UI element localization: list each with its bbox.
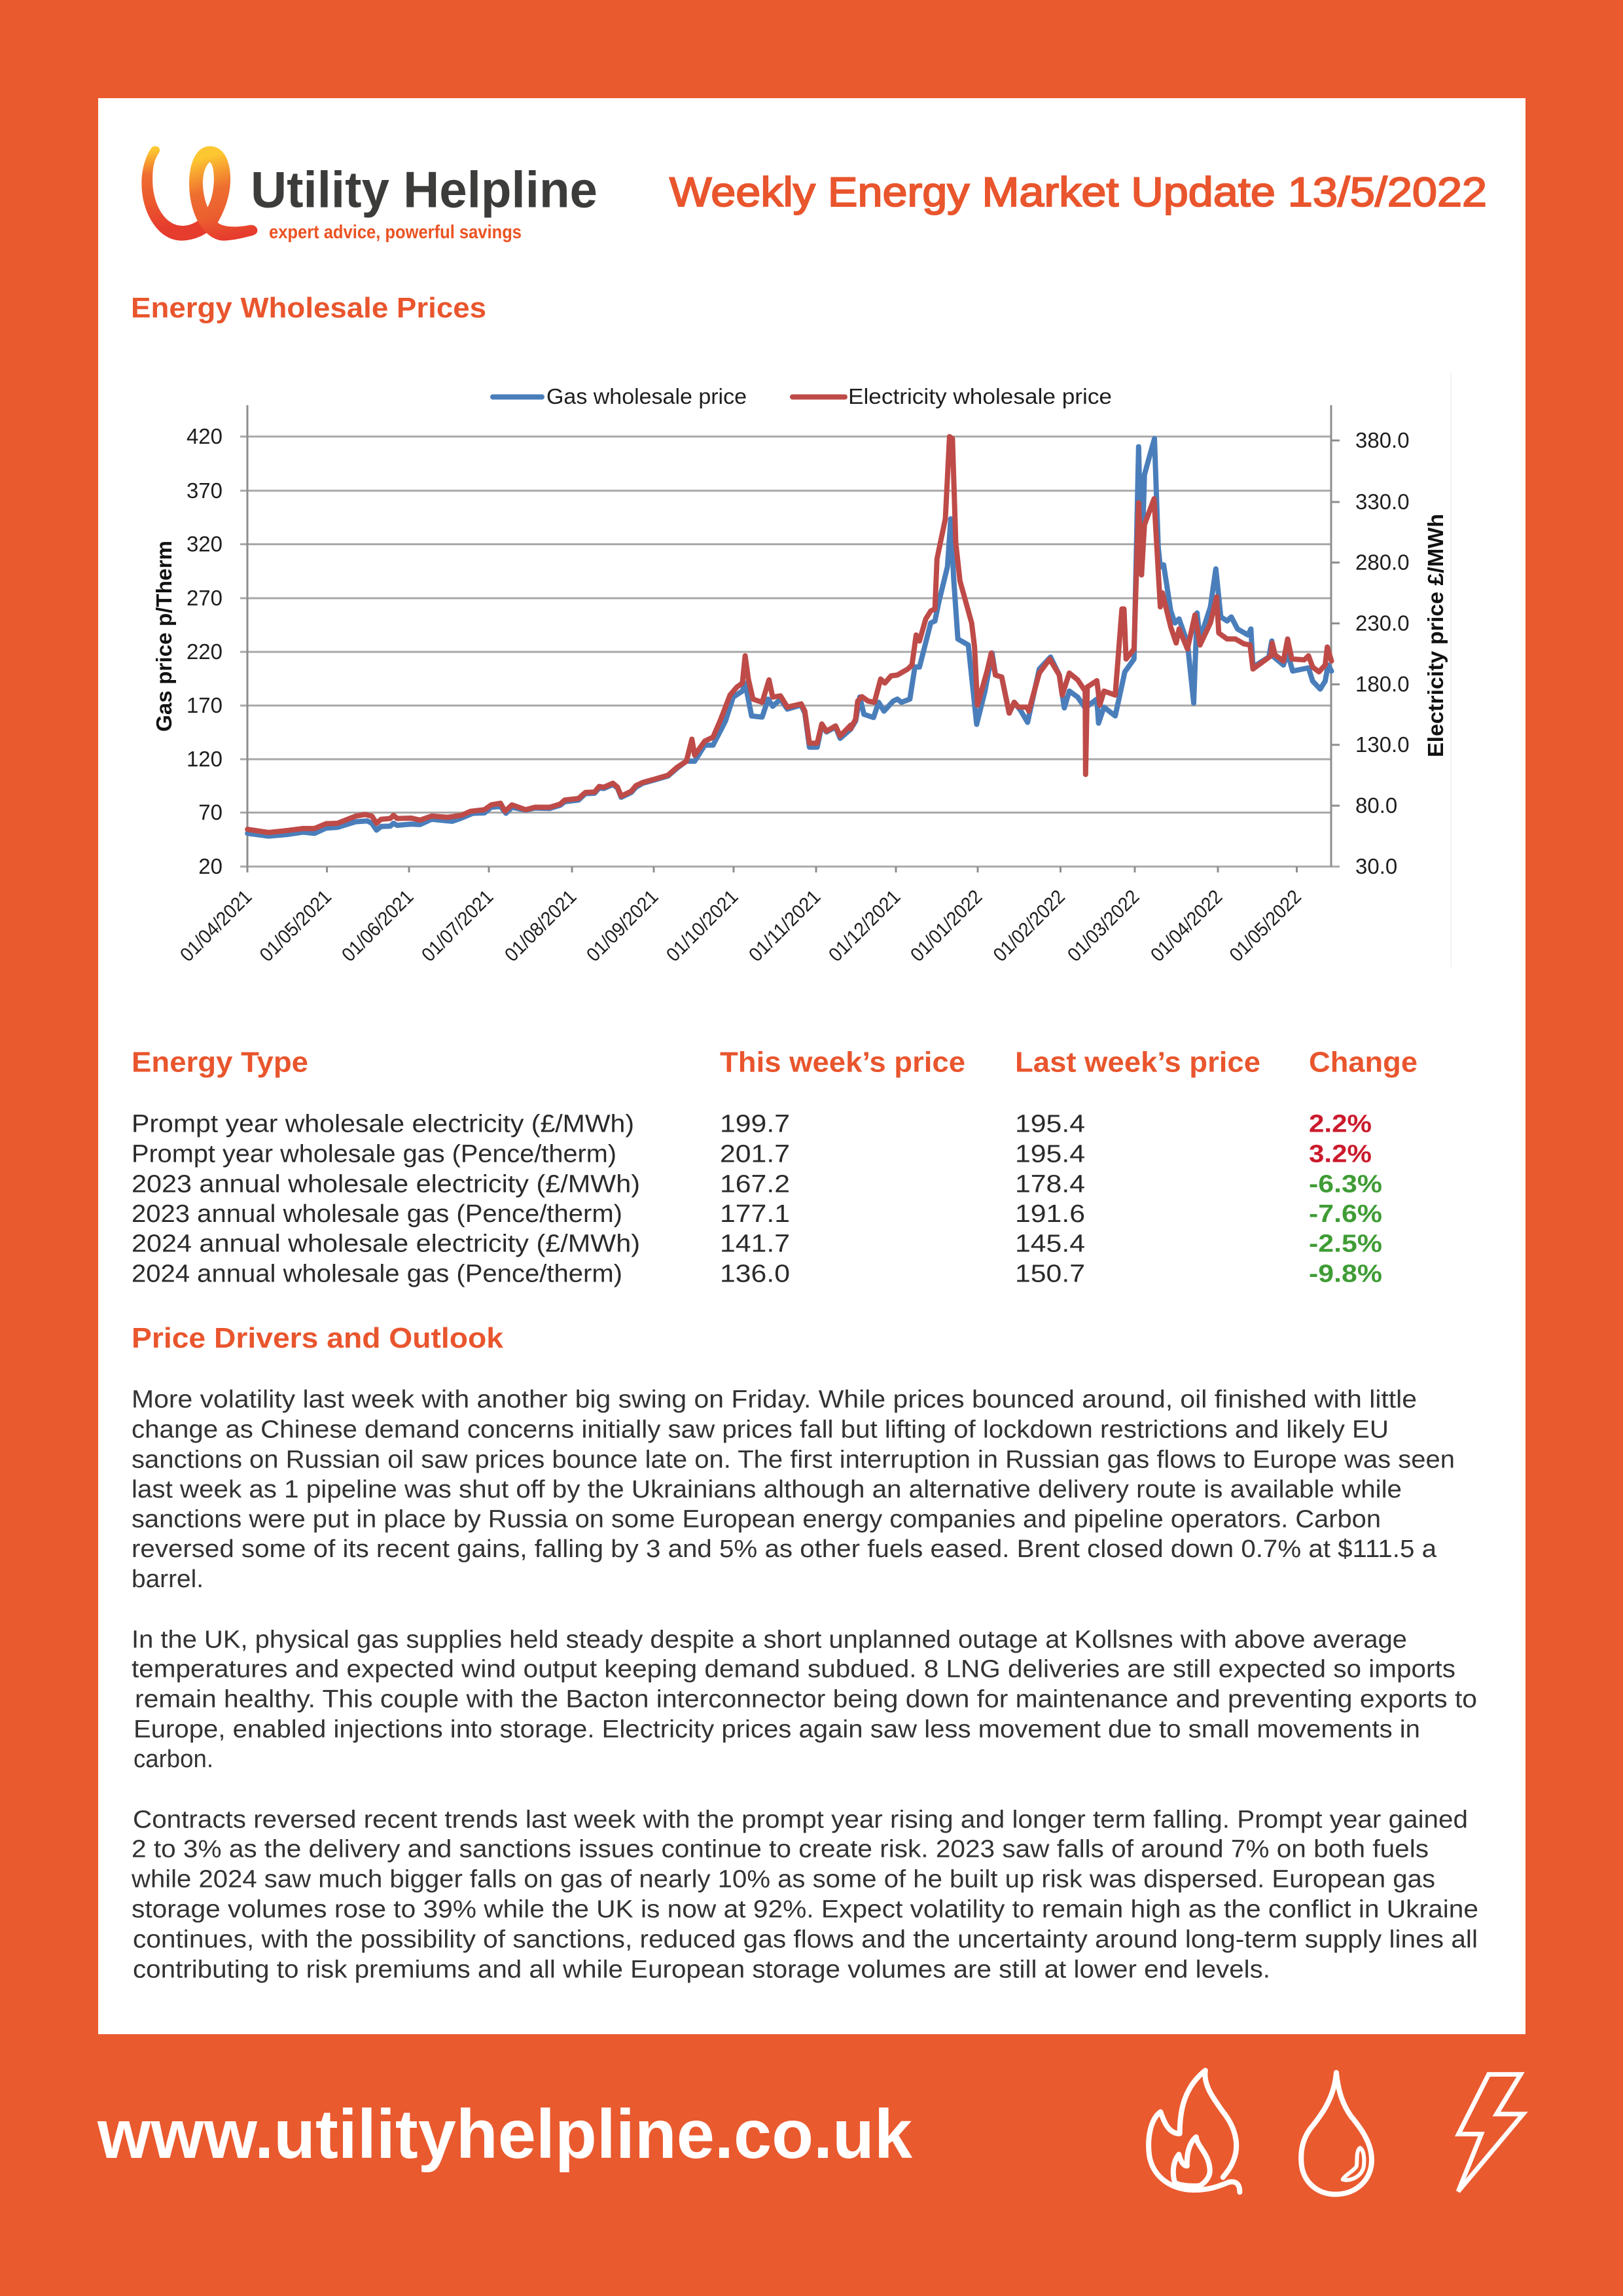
date axis labels: 01/10/2021 [662, 886, 742, 966]
heading: Price Drivers and Outlook: Price Drivers and Outlook [132, 1322, 504, 1354]
logo tagline: expert advice, powerful savings [269, 222, 522, 243]
paragraph 3: 2 to 3% as the delivery and sanctions issues continue to create risk. 2023 saw falls of around 7% on both fuels [132, 1835, 1429, 1863]
right axis labels: 380.0 [1355, 428, 1410, 452]
paragraph 1: last week as 1 pipeline was shut off by the Ukrainians although an alternative delivery route is available while [132, 1476, 1402, 1503]
paragraph 3: storage volumes rose to 39% while the UK is now at 92%. Expect volatility to remain high as the conflict in Ukraine [132, 1895, 1478, 1923]
heading: Energy Wholesale Prices: Energy Wholesale Prices [131, 292, 486, 324]
paragraph 1: barrel. [132, 1566, 204, 1593]
table row: 2023 gas: -7.6% [1309, 1200, 1382, 1228]
paragraph 1: More volatility last week with another big swing on Friday. While prices bounced around, oil finished with little [132, 1386, 1417, 1414]
table row: prompt year electricity: 2.2% [1309, 1110, 1372, 1138]
gas price line [247, 439, 1331, 836]
date axis labels: 01/11/2021 [745, 886, 825, 966]
table header row: This week’s price [720, 1047, 965, 1079]
paragraph 3: contributing to risk premiums and all while European storage volumes are still at lower end levels. [133, 1956, 1270, 1984]
logo icon: ribbon mark [141, 146, 257, 241]
table row: 2024 gas: 2024 annual wholesale gas (Pence/therm) [132, 1260, 622, 1287]
table row: 2023 gas: 191.6 [1015, 1200, 1085, 1228]
date axis labels: 01/12/2021 [825, 886, 904, 966]
table row: prompt year gas: Prompt year wholesale gas (Pence/therm) [132, 1140, 616, 1168]
date axis labels: 01/01/2022 [906, 886, 986, 966]
table row: prompt year gas: 201.7 [720, 1140, 790, 1168]
left axis labels: 270 [187, 586, 223, 610]
table row: 2023 gas [132, 1200, 1382, 1228]
date axis labels [176, 886, 1306, 966]
left axis title: Gas price p/Therm [152, 541, 176, 732]
logo wordmark: Utility Helpline [251, 161, 597, 219]
title: Weekly Energy Market Update 13/5/2022 [669, 170, 1487, 215]
table row: 2023 electricity [132, 1170, 1382, 1198]
table row: prompt year gas [132, 1140, 1372, 1168]
right axis labels: 280.0 [1355, 550, 1410, 575]
date axis labels: 01/03/2022 [1063, 886, 1143, 966]
table row: 2024 electricity: -2.5% [1309, 1230, 1382, 1258]
left axis labels [187, 424, 223, 878]
date axis labels: 01/04/2021 [176, 886, 256, 966]
table header row: Change [1309, 1047, 1418, 1079]
table row: 2024 electricity: 2024 annual wholesale electricity (£/MWh) [132, 1230, 640, 1258]
table row: 2024 gas: -9.8% [1309, 1260, 1382, 1287]
table row: 2023 electricity: 167.2 [720, 1170, 790, 1198]
table row: 2024 electricity: 141.7 [720, 1230, 790, 1258]
table row: 2024 gas: 136.0 [720, 1260, 790, 1287]
left axis labels: 220 [187, 639, 223, 664]
left axis labels: 70 [198, 800, 223, 825]
icon: lightning bolt [1458, 2074, 1523, 2191]
table row: prompt year electricity [132, 1110, 1372, 1138]
right axis labels: 180.0 [1355, 672, 1410, 696]
table row: prompt year electricity: 199.7 [720, 1110, 790, 1138]
logo: Utility Helpline [141, 146, 597, 243]
paragraph 2: Europe, enabled injections into storage. Electricity prices again saw less movement due to small movements in [134, 1715, 1420, 1743]
chart legend: Electricity wholesale price [848, 384, 1112, 408]
right axis labels: 230.0 [1355, 611, 1410, 635]
line chart: gas and electricity wholesale prices [152, 384, 1448, 966]
paragraph 3: Contracts reversed recent trends last week with the prompt year rising and longer term falling. Prompt year gained [133, 1806, 1468, 1833]
table row: prompt year gas: 3.2% [1309, 1140, 1372, 1168]
paragraph 3: continues, with the possibility of sanctions, reduced gas flows and the uncertainty around long-term supply lines all [133, 1926, 1478, 1954]
table header row [132, 1047, 1418, 1079]
website url: www.utilityhelpline.co.uk [97, 2096, 913, 2173]
price table [132, 1047, 1418, 1287]
table row: 2023 electricity: 178.4 [1015, 1170, 1085, 1198]
table row: 2023 electricity: -6.3% [1309, 1170, 1382, 1198]
table header row: Last week’s price [1015, 1047, 1260, 1079]
left axis labels: 420 [187, 424, 223, 448]
right axis labels: 30.0 [1355, 854, 1397, 878]
date axis labels: 01/02/2022 [990, 886, 1069, 966]
table row: 2023 gas: 2023 annual wholesale gas (Pence/therm) [132, 1200, 622, 1228]
left axis labels: 320 [187, 531, 223, 556]
table row: 2024 gas: 150.7 [1015, 1260, 1085, 1287]
table row: prompt year electricity: 195.4 [1015, 1110, 1085, 1138]
table header row: Energy Type [132, 1047, 308, 1079]
paragraph 1: sanctions were put in place by Russia on some European energy companies and pipeline operators. Carbon [132, 1505, 1381, 1533]
date axis labels: 01/06/2021 [338, 886, 418, 966]
paragraph 2: carbon. [134, 1746, 213, 1773]
left axis labels: 120 [187, 747, 223, 771]
chart axes and ticks [247, 405, 1340, 872]
table row: 2024 gas [132, 1260, 1382, 1287]
date axis labels: 01/04/2022 [1147, 886, 1226, 966]
paragraph 1: change as Chinese demand concerns initially saw prices fall but lifting of lockdown restrictions and likely EU [132, 1416, 1389, 1444]
left axis labels: 20 [198, 854, 223, 878]
paragraph 1: sanctions on Russian oil saw prices bounce late on. The first interruption in Russian gas flows to Europe was seen [132, 1446, 1455, 1474]
date axis labels: 01/05/2022 [1226, 886, 1306, 966]
table row: 2024 electricity: 145.4 [1015, 1230, 1085, 1258]
paragraph 2: remain healthy. This couple with the Bacton interconnector being down for maintenance and preventing exports to [135, 1686, 1477, 1713]
paragraph 2: In the UK, physical gas supplies held steady despite a short unplanned outage at Kollsnes with above average [132, 1626, 1407, 1653]
table row: 2023 gas: 177.1 [720, 1200, 790, 1228]
left axis labels: 370 [187, 478, 223, 503]
table row: 2024 electricity [132, 1230, 1382, 1258]
right axis labels [1355, 428, 1410, 878]
table row: prompt year gas: 195.4 [1015, 1140, 1085, 1168]
table row: prompt year electricity: Prompt year wholesale electricity (£/MWh) [132, 1110, 634, 1138]
right axis labels: 130.0 [1355, 732, 1410, 757]
icon: water drop [1301, 2073, 1372, 2195]
chart legend: Gas wholesale price [546, 384, 747, 408]
chart gridlines [240, 437, 1340, 867]
table row: 2023 electricity: 2023 annual wholesale electricity (£/MWh) [132, 1170, 640, 1198]
chart legend [493, 384, 1112, 408]
date axis labels: 01/07/2021 [418, 886, 497, 966]
icon: flame [1149, 2070, 1240, 2192]
paragraph 1 [132, 1386, 1455, 1593]
paragraph 3 [131, 1806, 1478, 1984]
right axis title: Electricity price £/MWh [1423, 514, 1448, 757]
right axis labels: 330.0 [1355, 490, 1410, 514]
date axis labels: 01/09/2021 [582, 886, 662, 966]
paragraph 2: temperatures and expected wind output keeping demand subdued. 8 LNG deliveries are still expected so imports [132, 1656, 1455, 1683]
right axis labels: 80.0 [1355, 793, 1397, 817]
date axis labels: 01/08/2021 [501, 886, 580, 966]
paragraph 3: while 2024 saw much bigger falls on gas of nearly 10% as some of he built up risk was dispersed. European gas [131, 1865, 1435, 1893]
paragraph 2 [132, 1626, 1477, 1773]
paragraph 1: reversed some of its recent gains, falling by 3 and 5% as other fuels eased. Brent closed down 0.7% at $111.5 a [132, 1535, 1437, 1563]
white content panel [98, 98, 1525, 2034]
electricity price line [247, 437, 1331, 833]
left axis labels: 170 [187, 693, 223, 717]
date axis labels: 01/05/2021 [256, 886, 336, 966]
